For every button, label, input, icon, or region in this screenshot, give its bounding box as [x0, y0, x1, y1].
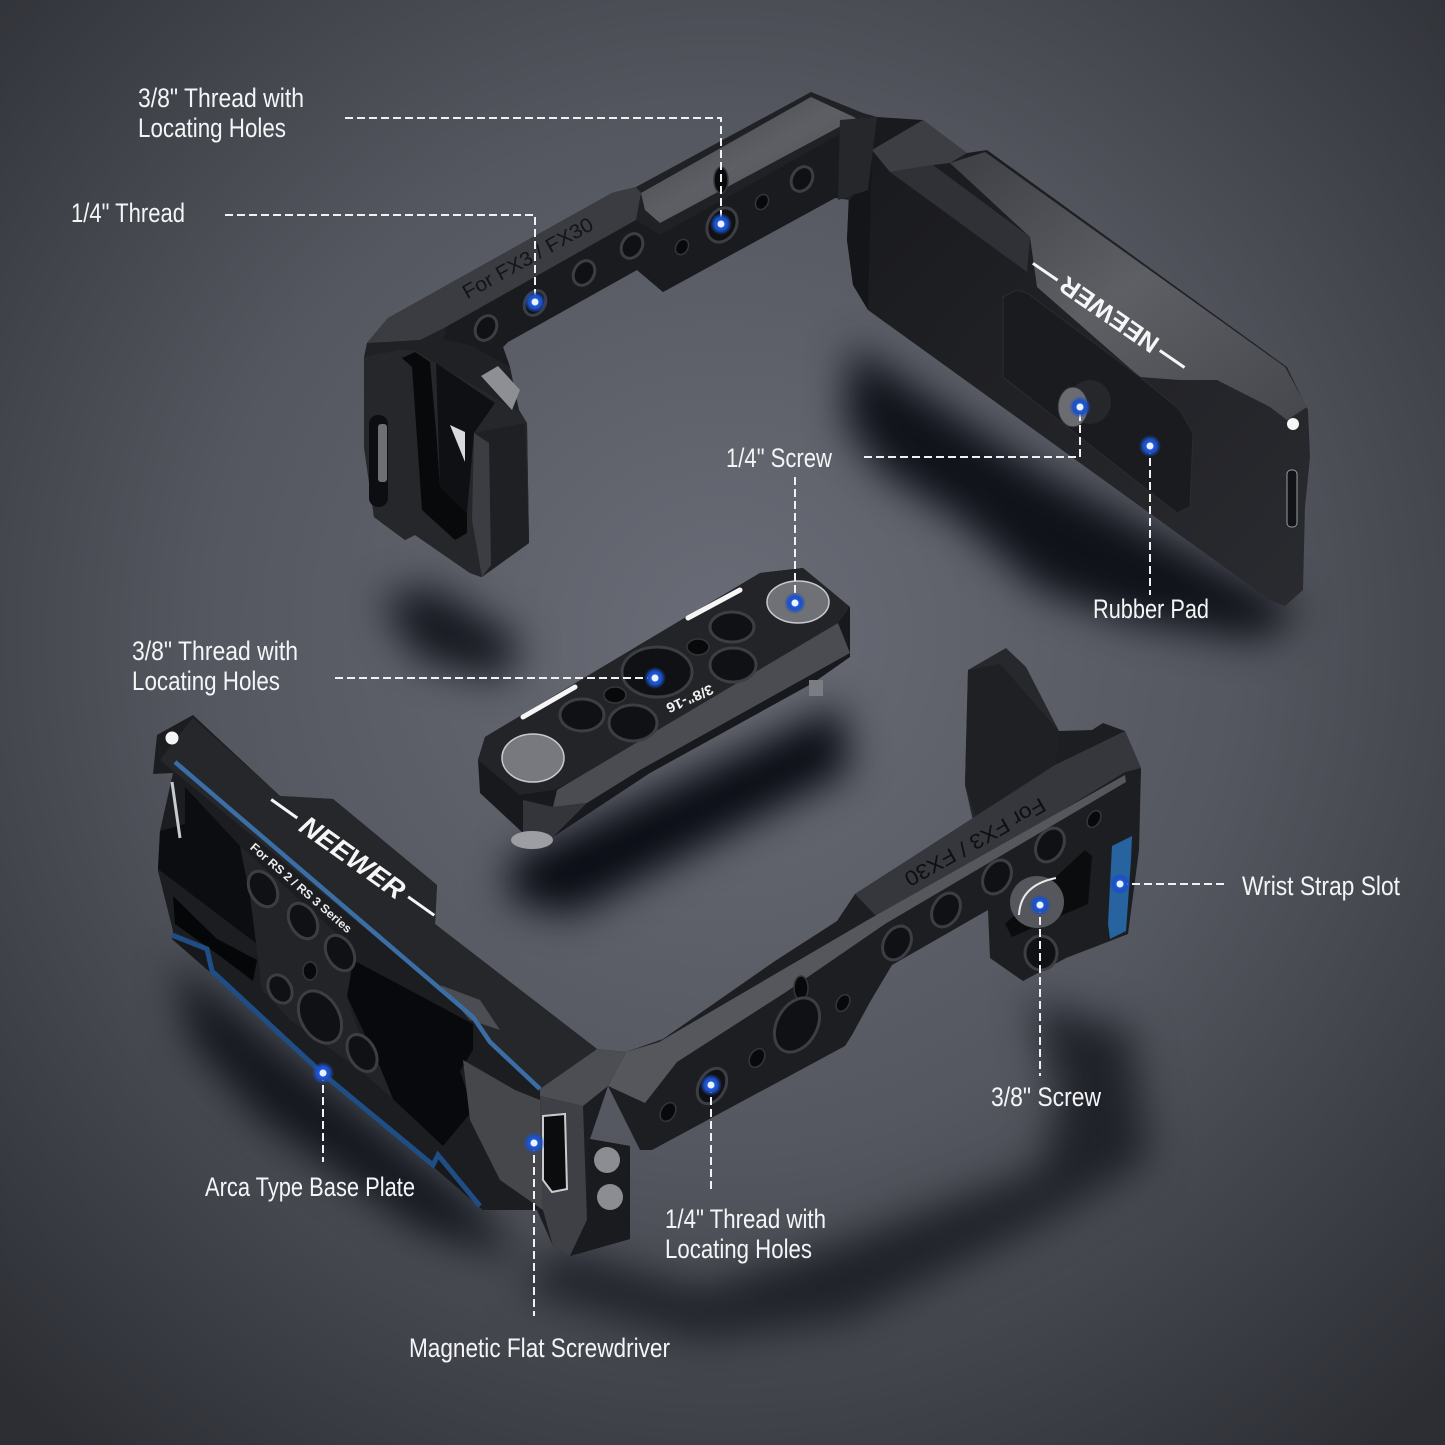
arm holes: [471, 163, 817, 344]
base plate: [153, 715, 630, 1256]
engraved text: For FX3 / FX30: For FX3 / FX30: [900, 793, 1049, 890]
label: rubber pad: Rubber Pad: [1093, 594, 1209, 624]
label: 1/4 thread lower: Locating Holes: [665, 1234, 812, 1264]
bars: [523, 590, 740, 717]
label: 1/4 screw: [726, 396, 1091, 614]
side clip: [364, 350, 529, 577]
corner top face: [540, 1049, 626, 1106]
interior left: [158, 787, 273, 956]
label: 3/8 thread middle: 3/8" Thread with: [132, 636, 298, 666]
right plate: [847, 117, 1310, 606]
label: 3/8 thread top: [138, 83, 732, 235]
raised plate lit bevel: [440, 985, 500, 1030]
label: wrist strap slot: Wrist Strap Slot: [1242, 871, 1400, 901]
strap slot: [369, 415, 388, 507]
blue strap slot: [1108, 836, 1132, 939]
side pin: [1287, 470, 1297, 527]
raised block: [641, 97, 856, 223]
plate holes: [242, 866, 383, 1077]
engraved text: For FX3 / FX30: For FX3 / FX30: [459, 214, 597, 304]
label: wrist strap slot: [1109, 871, 1400, 901]
3/8 screw: [1010, 876, 1064, 928]
label: 3/8 thread top: Locating Holes: [138, 113, 286, 143]
label: rubber pad: [1093, 435, 1209, 624]
text strip: [855, 731, 1141, 921]
middle plate: [478, 568, 850, 849]
upright tab: [965, 648, 1059, 830]
label: 3/8 thread middle: Locating Holes: [132, 666, 280, 696]
pin: [172, 782, 180, 838]
link piece: [463, 1060, 543, 1210]
lower rail: [172, 939, 483, 1210]
label: magnetic flat screwdriver: Magnetic Flat Screwdriver: [409, 1333, 670, 1363]
bracket: bottom cage: [153, 715, 630, 1256]
label: 1/4 screw: 1/4" Screw: [726, 443, 832, 473]
lit strip: [608, 775, 1126, 1103]
label: 1/4 thread: [71, 198, 546, 313]
label: 1/4 thread lower: 1/4" Thread with: [665, 1204, 826, 1234]
mount label: For RS 2 / RS 3 Series: [247, 840, 355, 936]
top rim: [160, 718, 597, 1089]
label: magnetic flat screwdriver: [409, 1132, 670, 1363]
mounting dot: [1287, 418, 1299, 430]
label: 3/8 thread middle: [132, 636, 666, 696]
lit edge: [553, 623, 850, 807]
arm recess: [1005, 850, 1092, 937]
spring screw: [481, 366, 520, 410]
floor reflections: [175, 345, 1300, 1340]
arm joint: [838, 117, 877, 200]
corner block: [540, 1096, 587, 1256]
interior right: [347, 960, 473, 1146]
label: 3/8 thread top: 3/8" Thread with: [138, 83, 304, 113]
top arm: [364, 92, 877, 577]
label: 1/4 thread lower: [665, 1074, 826, 1264]
logo: NEEWER: NEEWER: [294, 810, 411, 906]
label: arca base plate: Arca Type Base Plate: [205, 1172, 415, 1202]
label: 3/8 screw: [991, 894, 1101, 1112]
middle plate: 3/8"-16: [664, 682, 716, 717]
screw block: [570, 1139, 630, 1256]
white sliver: [450, 425, 465, 462]
top bevel: [950, 152, 1307, 420]
centre plate: [240, 846, 393, 1099]
logo: NEEWER: [1026, 251, 1193, 378]
label: arca base plate: [205, 1062, 415, 1202]
blue lines: [175, 762, 540, 1089]
logo: NEEWER: NEEWER: [1055, 270, 1164, 358]
label: 1/4 thread: 1/4" Thread: [71, 198, 185, 228]
arm upper strip: [367, 187, 641, 343]
socket screws: [767, 581, 829, 623]
arm body: [608, 723, 1141, 1150]
holes: [560, 612, 756, 741]
rubber pad: [1003, 290, 1193, 513]
label: 3/8 screw: 3/8" Screw: [991, 1082, 1101, 1112]
logo: NEEWER: [262, 788, 443, 928]
arm holes: [657, 808, 1104, 1124]
bottom arm: [608, 648, 1141, 1150]
screw on pad: [1069, 380, 1111, 424]
bracket: top cage: [364, 92, 1310, 606]
